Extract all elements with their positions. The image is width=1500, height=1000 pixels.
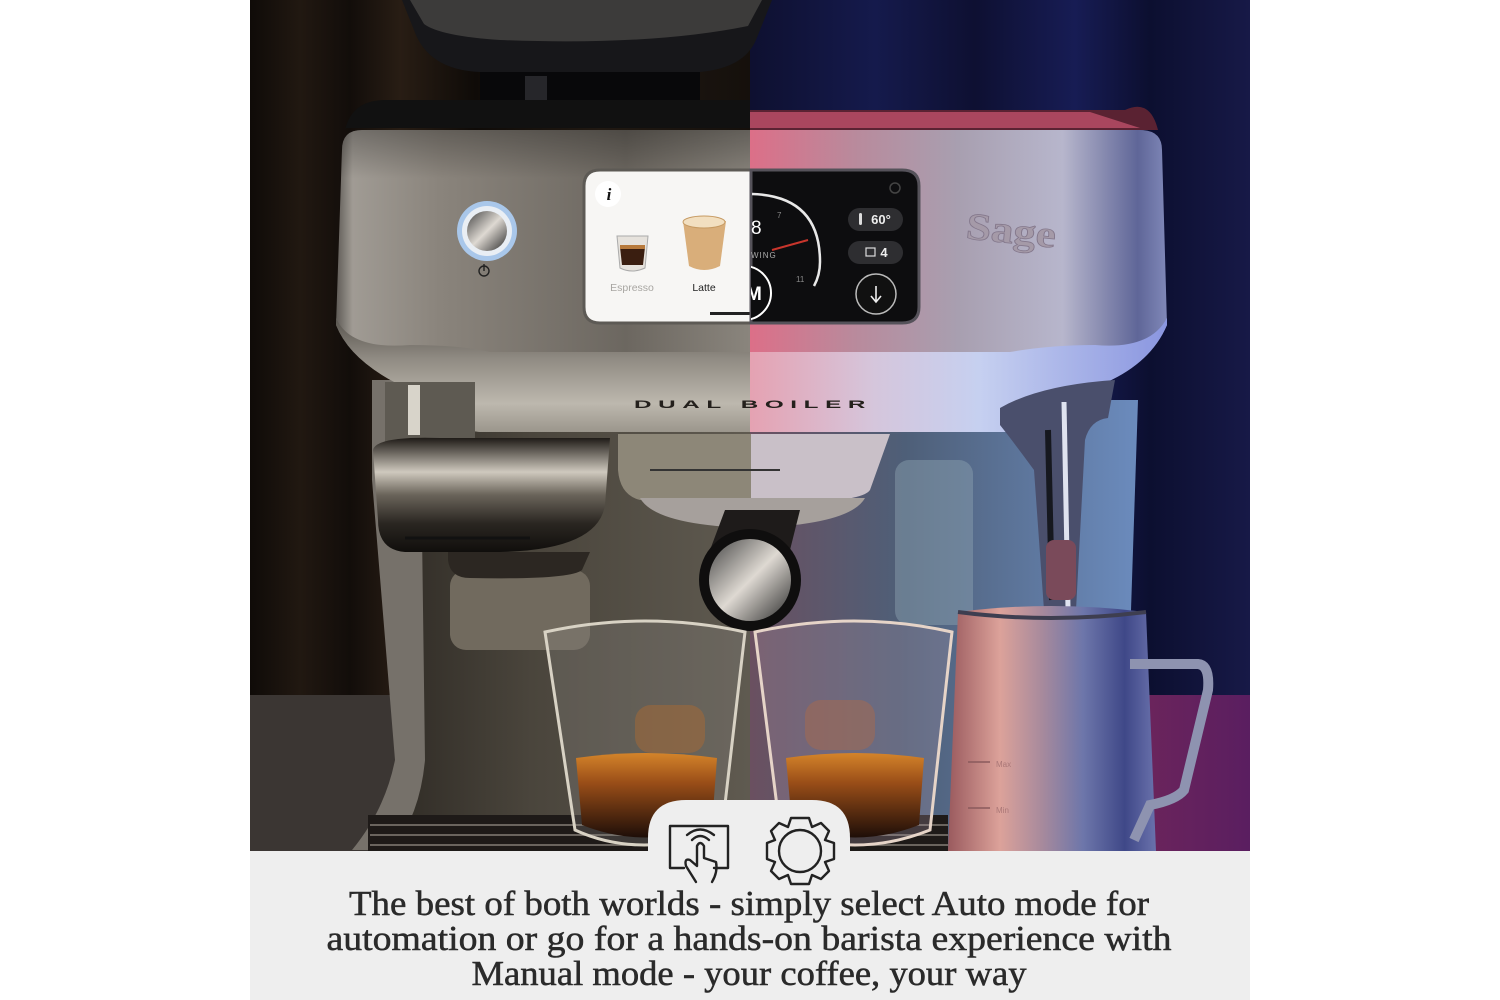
temperature pill [848,208,903,231]
group head and left drip collar [373,382,610,578]
caption text [326,884,1172,993]
machine head: left half [336,130,750,432]
icon: touch screen hand [670,826,728,882]
gauge dial: M [746,284,762,305]
caption text: Manual mode - your coffee, your way [472,954,1027,993]
gauge dial [751,192,822,320]
gauge dial: 7 [777,211,782,220]
machine lower body and water tank [352,380,1138,851]
icon: gear [767,818,834,884]
dual boiler label: DUAL BOILER [634,399,872,411]
background: right blue curtain [750,0,1250,851]
gauge dial: 8 [751,218,762,239]
milk jug: Min [996,806,1009,815]
info button: i [607,185,612,204]
shots pill [848,241,903,264]
info button [595,181,621,207]
gauge dial: 11 [796,275,805,284]
espresso icon [617,236,648,271]
latte icon [683,216,726,270]
portafilter [618,434,890,631]
milk jug [948,606,1208,851]
lower sweep: left [336,318,750,432]
power button [457,201,517,276]
gauge dial: WING [751,251,777,260]
infographic: coffee machine scene with caption [250,0,1250,1000]
caption text: The best of both worlds - simply select Auto mode for [349,884,1149,923]
latte label: Latte [692,282,716,294]
machine top plate [345,100,1158,130]
espresso label: Espresso [610,282,654,294]
background: left warm curtain [250,0,750,851]
machine head: right half [750,130,1167,432]
shots pill: 4 [880,245,888,260]
steam button [856,274,896,314]
right glass [755,621,952,845]
milk jug: Max [996,760,1011,769]
temperature pill: 60° [871,212,891,227]
steam wand [1000,380,1115,610]
touchscreen: manual mode [750,168,920,324]
bean hopper [402,0,772,110]
settings icon [890,183,900,193]
brand logo: Sage [964,206,1058,257]
lower sweep: right [750,318,1167,432]
touchscreen: auto mode [584,170,751,323]
caption panel [250,800,1250,1000]
caption text: automation or go for a hands-on barista experience with [326,919,1172,958]
left glass [545,621,745,845]
